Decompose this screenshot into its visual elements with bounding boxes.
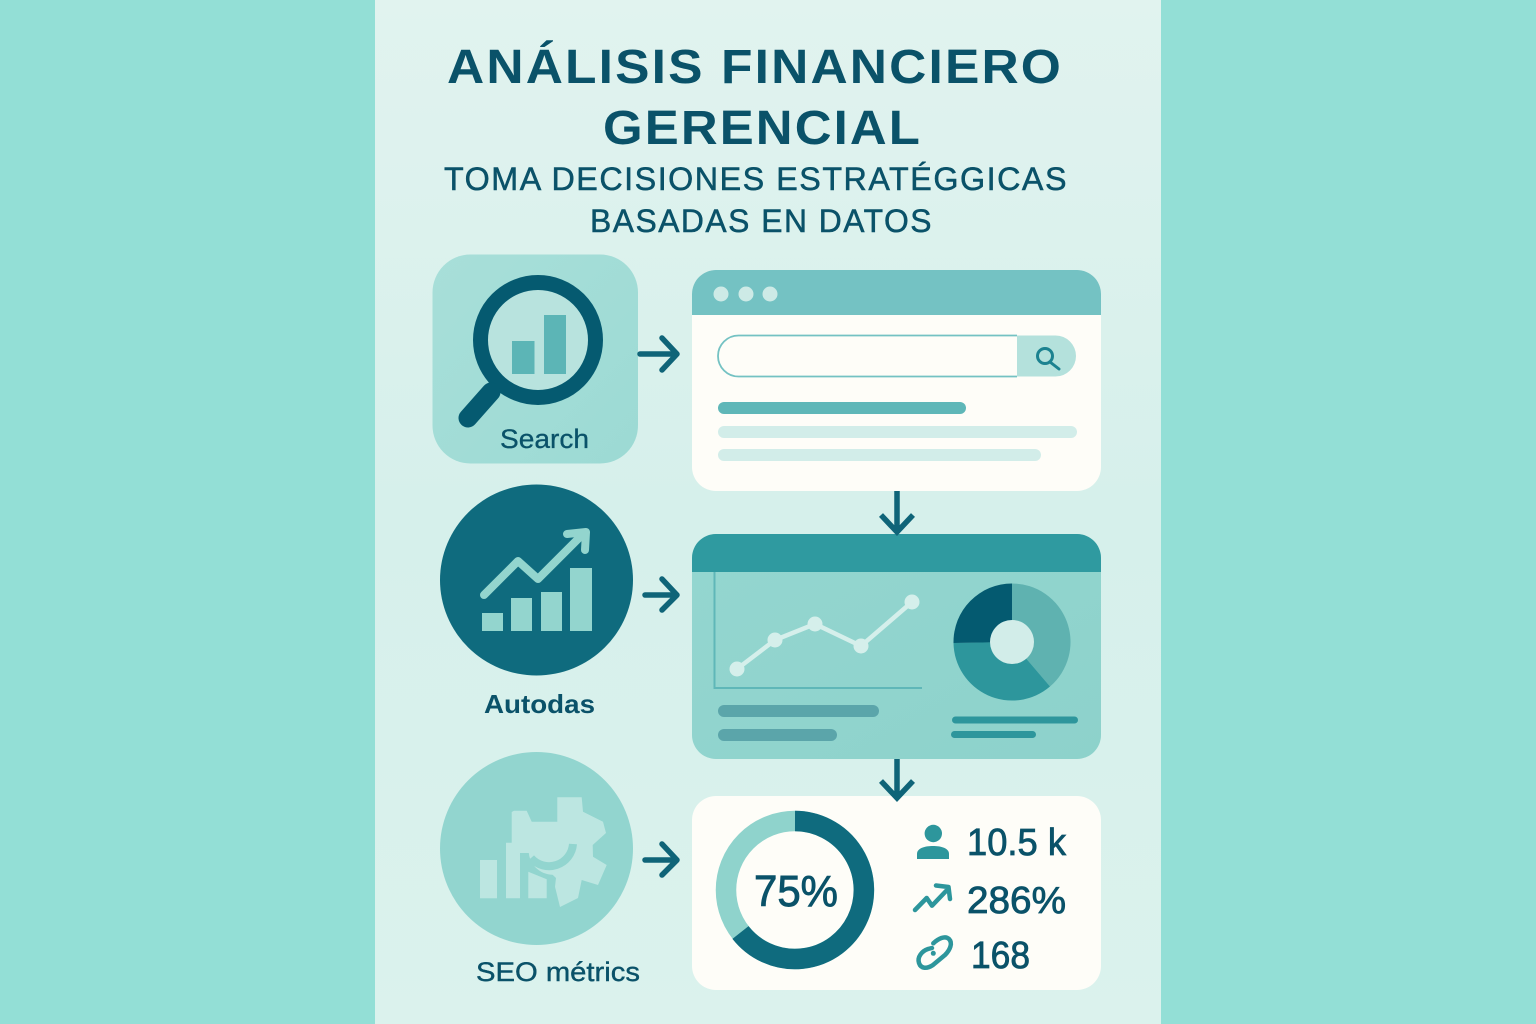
donut chart 75% (726, 821, 864, 959)
central panel (375, 0, 1161, 1024)
stat: users (917, 822, 1067, 864)
icon: growth circle (440, 484, 633, 676)
label: Autodas: Autodas (484, 689, 595, 719)
title: GERENCIAL (603, 102, 922, 155)
arrow: dashboard to metrics (881, 759, 913, 798)
dashboard text lines (718, 705, 1078, 741)
label: Search: Search (500, 424, 589, 454)
donut chart 75%: 75% (754, 867, 838, 916)
panel: metrics card (692, 796, 1101, 990)
subtitle: TOMA DECISIONES ESTRATÉGGICAS (444, 161, 1068, 197)
label: SEO métrics: SEO métrics (476, 957, 640, 987)
title (447, 40, 1063, 155)
search bar (718, 336, 1076, 376)
stat: links (919, 935, 1030, 977)
stat: links: 168 (971, 935, 1030, 977)
panel: search tile (432, 254, 638, 464)
arrow: browser to dashboard (881, 491, 913, 532)
subtitle (444, 161, 1068, 239)
pie chart (953, 584, 1071, 701)
icon: SEO gear circle (440, 752, 633, 945)
result lines (718, 402, 1077, 461)
stat: users: 10.5 k (967, 822, 1067, 864)
panel: browser window (692, 270, 1101, 491)
subtitle: BASADAS EN DATOS (590, 203, 933, 239)
panel: dashboard (692, 534, 1101, 759)
stat: growth (915, 880, 1066, 922)
line chart (714, 572, 922, 688)
icon: magnifier with bars (468, 282, 596, 418)
arrow: growth to dashboard (645, 579, 677, 610)
arrow: search to browser (640, 338, 677, 370)
title: ANÁLISIS FINANCIERO (447, 40, 1063, 94)
window dots (714, 286, 778, 302)
stat: growth: 286% (967, 880, 1066, 922)
arrow: gear to metrics (645, 844, 677, 875)
